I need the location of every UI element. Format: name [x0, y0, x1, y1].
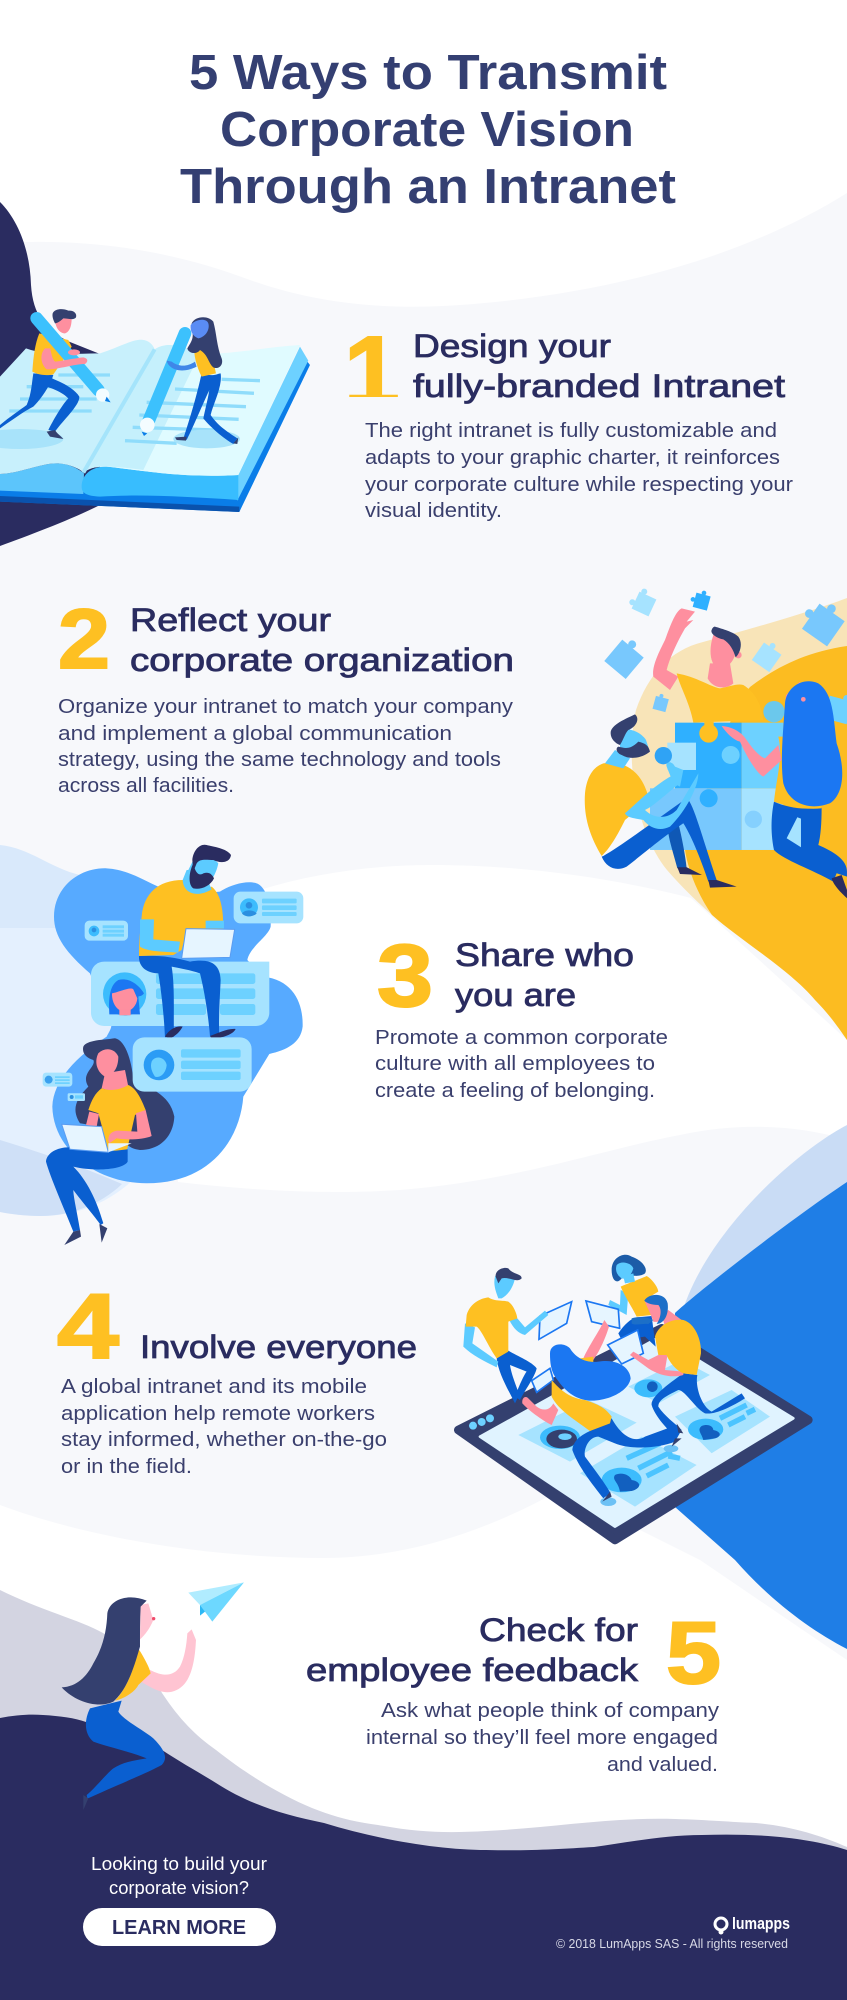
section 5 body text: Ask what people think of company	[381, 1699, 720, 1722]
section 4 body text: application help remote workers	[61, 1402, 375, 1425]
section 4 body text: or in the field.	[61, 1455, 192, 1478]
illustration: team on a giant tablet	[458, 1255, 808, 1540]
illustration: open book with two people writing	[0, 309, 310, 512]
title: Through an Intranet	[180, 160, 676, 214]
lumapps logo	[715, 1914, 790, 1934]
section 2 heading	[130, 602, 514, 678]
copyright: © 2018 LumApps SAS - All rights reserved	[556, 1937, 788, 1951]
section 2 body text	[58, 695, 514, 797]
section 2 body text: Organize your intranet to match your company	[58, 695, 514, 718]
section 5 body text: internal so they’ll feel more engaged	[366, 1726, 718, 1749]
section 2 body text: and implement a global communication	[58, 722, 452, 745]
section 4 body text: stay informed, whether on-the-go	[61, 1428, 387, 1451]
section 5 heading: Check for	[479, 1612, 638, 1648]
call to action text: Looking to build your	[91, 1854, 267, 1874]
section 3 body text: culture with all employees to	[375, 1052, 655, 1075]
section 3 heading: you are	[455, 977, 576, 1013]
section 1 heading: fully-branded Intranet	[413, 368, 785, 404]
seated bearded man	[585, 714, 737, 888]
woman with blue hair in the foreground	[522, 1320, 683, 1502]
illustration: team assembling a puzzle	[585, 585, 847, 898]
large puzzle block	[650, 722, 783, 850]
woman with pencil	[140, 317, 238, 444]
section 2 body text: strategy, using the same technology and tools	[58, 748, 501, 771]
section 4 number: 4	[57, 1276, 119, 1378]
section 5 heading: employee feedback	[306, 1652, 639, 1688]
section 2 heading: Reflect your	[130, 602, 331, 638]
man on laptop	[139, 845, 236, 1038]
man with pencil	[0, 309, 111, 439]
section 5 number: 5	[666, 1603, 721, 1702]
profile card: centre with woman avatar	[91, 962, 269, 1026]
text lines on the book pages	[9, 375, 260, 443]
profile card: left	[85, 921, 128, 941]
call to action text	[91, 1854, 267, 1898]
section 3 body text	[375, 1026, 668, 1102]
man reaching up	[653, 608, 763, 723]
title: 5 Ways to Transmit	[189, 46, 667, 100]
section 1 body text: The right intranet is fully customizable and	[365, 419, 777, 442]
bearded man on the right	[630, 1295, 745, 1437]
profile card: lower	[133, 1037, 252, 1092]
learn more button: LEARN MORE	[112, 1917, 246, 1939]
section 5 heading	[306, 1612, 639, 1688]
woman at the back	[608, 1255, 658, 1347]
section 1 body text: your corporate culture while respecting your	[365, 473, 793, 496]
section 2 body text: across all facilities.	[58, 774, 234, 797]
icon: paper plane	[188, 1582, 244, 1622]
section 3 body text: create a feeling of belonging.	[375, 1079, 655, 1102]
illustration: woman and paper plane	[62, 1582, 244, 1810]
section 3 number: 3	[377, 926, 433, 1025]
learn more button	[83, 1908, 276, 1946]
call to action text: corporate vision?	[109, 1878, 249, 1898]
section 1 body text: visual identity.	[365, 499, 502, 522]
section 3 body text: Promote a common corporate	[375, 1026, 668, 1049]
section 1 body text: adapts to your graphic charter, it reinforces	[365, 446, 780, 469]
seated woman with laptop	[43, 1037, 252, 1245]
section 4 body text	[61, 1375, 387, 1478]
profile card: right	[234, 892, 303, 923]
man on the left	[463, 1268, 548, 1403]
section 5 body text: and valued.	[607, 1753, 718, 1776]
section 3 heading	[455, 937, 634, 1013]
lumapps logo: lumapps	[732, 1914, 790, 1933]
small floating cards	[43, 1073, 85, 1101]
section 1 heading	[413, 328, 785, 404]
illustration: people with profile cards	[43, 845, 303, 1245]
section 1 heading: Design your	[413, 328, 611, 364]
section 1 number: 1	[344, 316, 400, 428]
section 4 heading: Involve everyone	[140, 1329, 417, 1365]
floating puzzle pieces	[604, 585, 847, 724]
section 5 body text	[366, 1699, 720, 1776]
section 3 heading: Share who	[455, 937, 634, 973]
handheld tablets	[532, 1301, 643, 1392]
woman pointing at puzzle	[722, 681, 847, 898]
section 2 number: 2	[58, 592, 110, 686]
section 4 body text: A global intranet and its mobile	[61, 1375, 367, 1398]
section 2 heading: corporate organization	[130, 642, 514, 678]
tablet	[458, 1328, 808, 1540]
section 1 body text	[365, 419, 793, 522]
title	[180, 46, 676, 214]
title: Corporate Vision	[220, 103, 634, 157]
